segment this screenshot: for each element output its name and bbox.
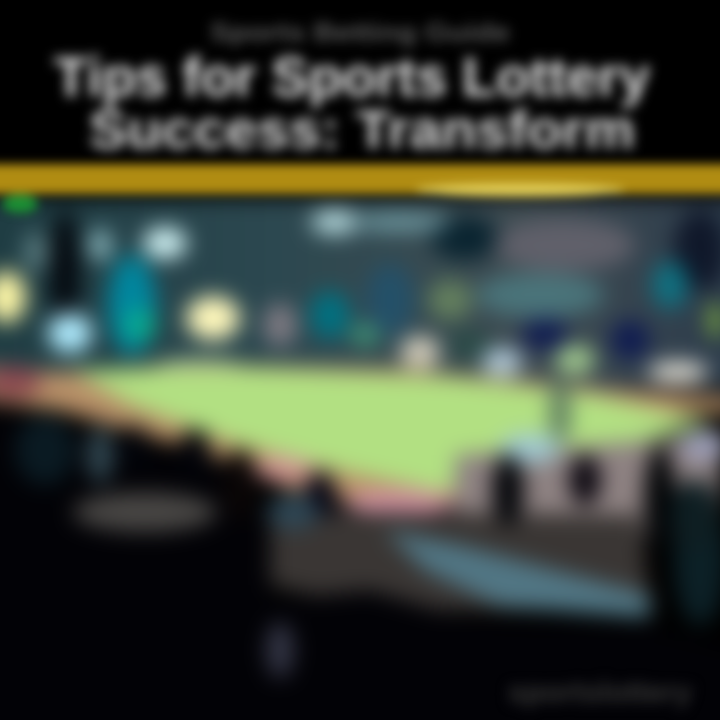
player on pitch	[549, 380, 571, 444]
yellow title band	[0, 164, 720, 213]
photo: stadium scene	[0, 198, 720, 720]
pitch border	[0, 364, 720, 514]
title line 1: Tips for Sports Lottery	[54, 45, 650, 108]
crowd mid-ground	[270, 433, 720, 618]
title block	[54, 17, 650, 160]
title line 2: Success: Transform	[89, 100, 635, 160]
bottom-right caption: sportslottery	[508, 676, 692, 709]
eyebrow text: Sports Betting Guide	[210, 17, 510, 47]
green pitch	[72, 368, 712, 492]
stadium lights	[0, 210, 720, 382]
dark foreground crowd	[0, 405, 720, 720]
photo: stadium stands	[0, 198, 720, 388]
